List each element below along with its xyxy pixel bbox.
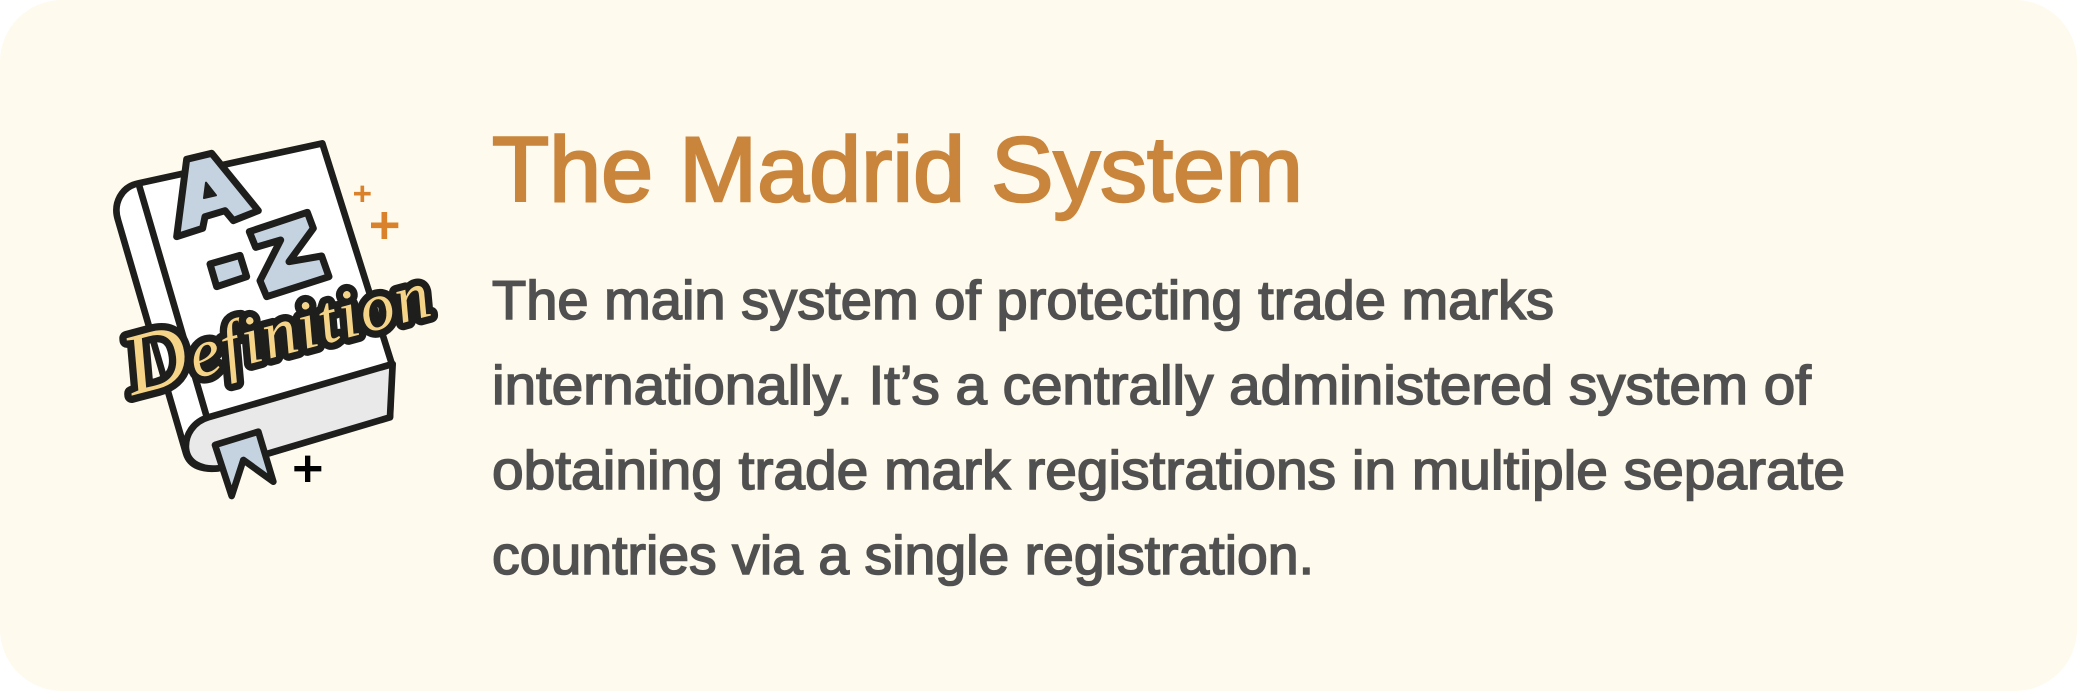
letter Z — [249, 212, 329, 297]
orange sparkles — [354, 186, 398, 239]
body text: internationally. It’s a centrally administered system of — [492, 354, 1812, 416]
body text: countries via a single registration. — [492, 524, 1314, 586]
icon: definition book — [112, 143, 439, 496]
letter dash — [210, 255, 247, 287]
book cover — [116, 143, 392, 469]
word Definition: Definition — [112, 240, 439, 414]
black sparkle — [294, 456, 321, 482]
title: The Madrid System — [492, 119, 1303, 221]
book spine line — [139, 185, 207, 417]
body text: obtaining trade mark registrations in multiple separate — [492, 439, 1845, 501]
bookmark ribbon — [215, 432, 273, 496]
letter A — [177, 153, 258, 237]
body text — [492, 269, 1845, 586]
book pages — [186, 364, 393, 469]
body text: The main system of protecting trade marks — [492, 269, 1554, 331]
